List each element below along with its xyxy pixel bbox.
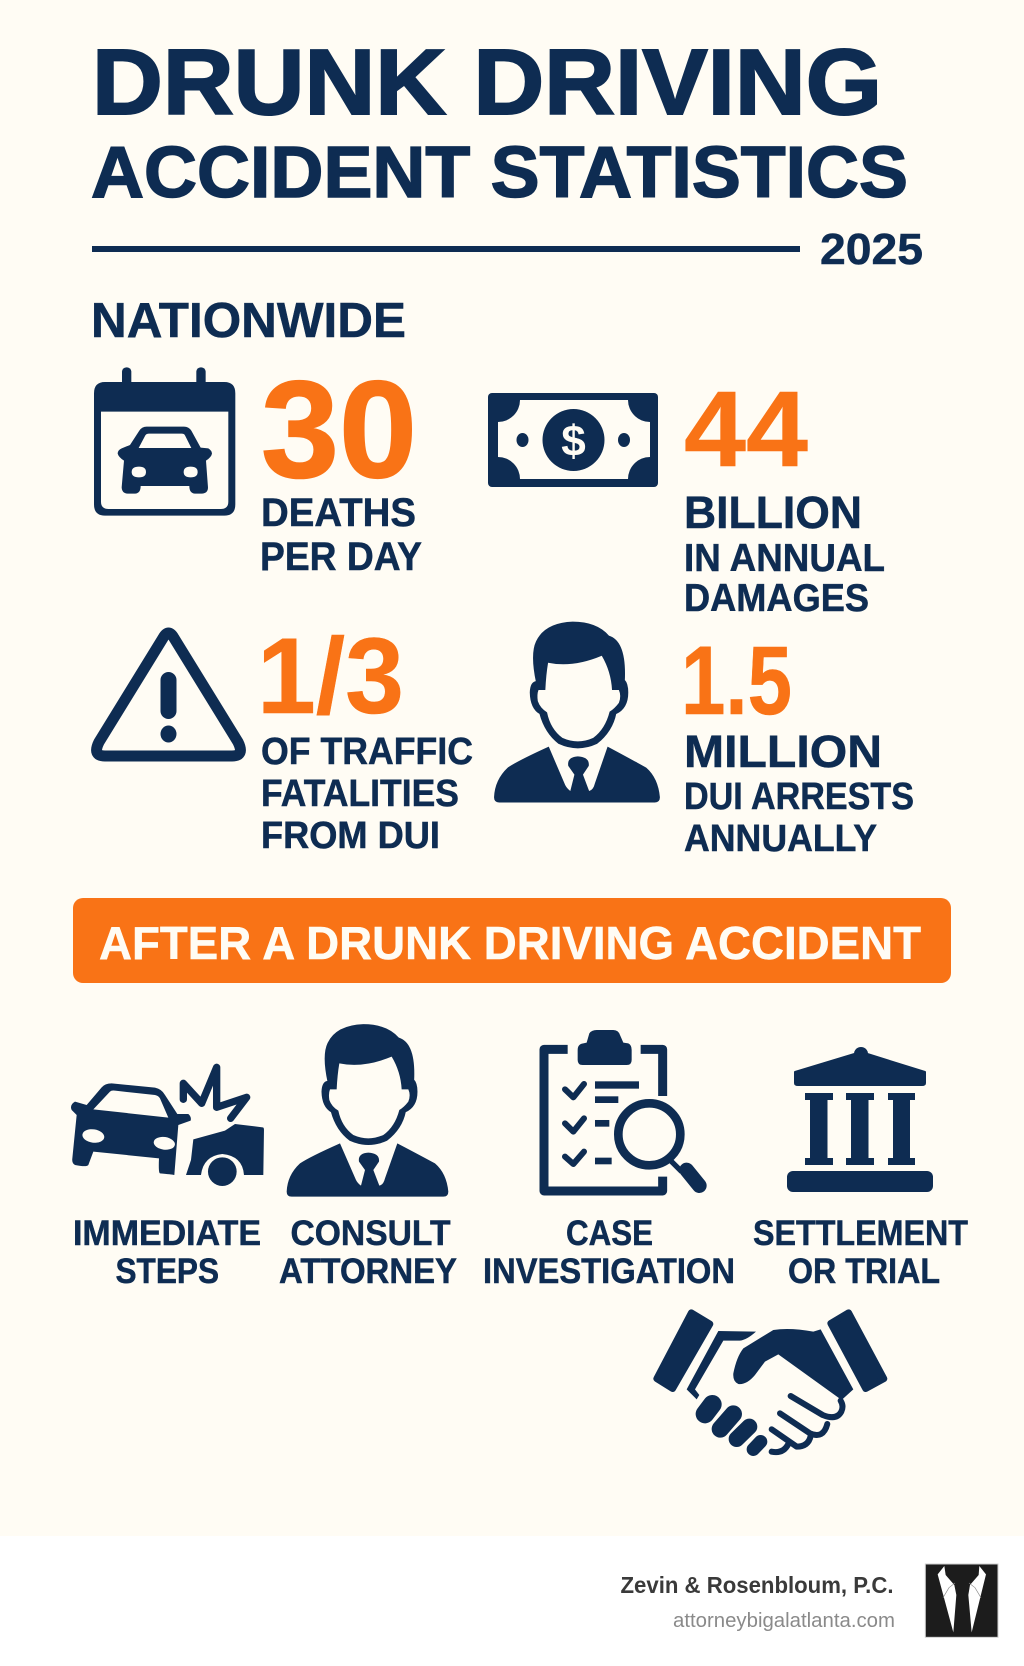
label: consult attorney: ATTORNEY xyxy=(279,1252,457,1291)
label: immediate steps: STEPS xyxy=(116,1252,219,1291)
label: settlement or trial xyxy=(753,1214,968,1291)
label: per day: PER DAY xyxy=(260,535,422,579)
heading: nationwide: NATIONWIDE xyxy=(91,294,406,348)
label: fatalities: FATALITIES xyxy=(261,773,459,815)
icon: handshake xyxy=(657,1313,884,1452)
banner: after a drunk driving accident: AFTER A DRUNK DRIVING ACCIDENT xyxy=(99,917,921,969)
icon: banknote: $ xyxy=(561,417,586,466)
label: consult attorney: CONSULT xyxy=(290,1214,450,1253)
label: consult attorney xyxy=(279,1214,457,1291)
icon: clipboard and magnifier xyxy=(544,1030,699,1191)
title rule xyxy=(92,246,800,252)
year: 2025 xyxy=(820,225,923,274)
label: from dui: FROM DUI xyxy=(261,815,440,857)
stat: 44 billion in annual damages xyxy=(684,368,885,620)
label: case investigation: INVESTIGATION xyxy=(483,1252,735,1291)
icon: warning triangle xyxy=(97,633,240,756)
label: settlement or trial: OR TRIAL xyxy=(788,1252,940,1291)
label: immediate steps: IMMEDIATE xyxy=(73,1214,261,1253)
number: 30: 30 xyxy=(261,353,417,507)
label: case investigation xyxy=(483,1214,735,1291)
label: immediate steps xyxy=(73,1214,261,1291)
icon: person in suit xyxy=(494,623,660,803)
label: billion: BILLION xyxy=(684,487,862,538)
label: of traffic: OF TRAFFIC xyxy=(261,731,473,773)
stat: 1/3 of traffic fatalities from dui xyxy=(257,615,473,857)
number: 44: 44 xyxy=(684,368,808,489)
icon: banknote xyxy=(488,393,658,487)
number: 1/3: 1/3 xyxy=(257,615,404,736)
footer: firm name: Zevin & Rosenbloum, P.C. xyxy=(620,1572,894,1598)
footer band xyxy=(0,1536,1024,1666)
icon: courthouse xyxy=(787,1047,933,1192)
icon: attorney xyxy=(287,1025,448,1197)
label: million: MILLION xyxy=(684,726,882,777)
stat: 30 deaths per day xyxy=(260,353,422,579)
footer: logo suit and tie xyxy=(925,1564,998,1637)
label: in annual: IN ANNUAL xyxy=(684,537,885,580)
title: drunk driving: DRUNK DRIVING xyxy=(92,30,882,134)
label: damages: DAMAGES xyxy=(684,577,869,620)
label: deaths: DEATHS xyxy=(261,491,416,535)
stat: 1.5 million dui arrests annually xyxy=(681,626,914,860)
icon: calendar with car xyxy=(94,367,235,516)
footer: website: attorneybigalatlanta.com xyxy=(673,1610,895,1632)
label: settlement or trial: SETTLEMENT xyxy=(753,1214,968,1253)
label: annually: ANNUALLY xyxy=(684,818,877,860)
banner: after a drunk driving accident xyxy=(73,898,951,983)
number: 1.5: 1.5 xyxy=(681,626,792,735)
label: dui arrests: DUI ARRESTS xyxy=(684,776,914,818)
icon: car crash xyxy=(71,1067,264,1186)
label: case investigation: CASE xyxy=(566,1214,653,1253)
subtitle: accident statistics: ACCIDENT STATISTICS xyxy=(91,133,908,213)
